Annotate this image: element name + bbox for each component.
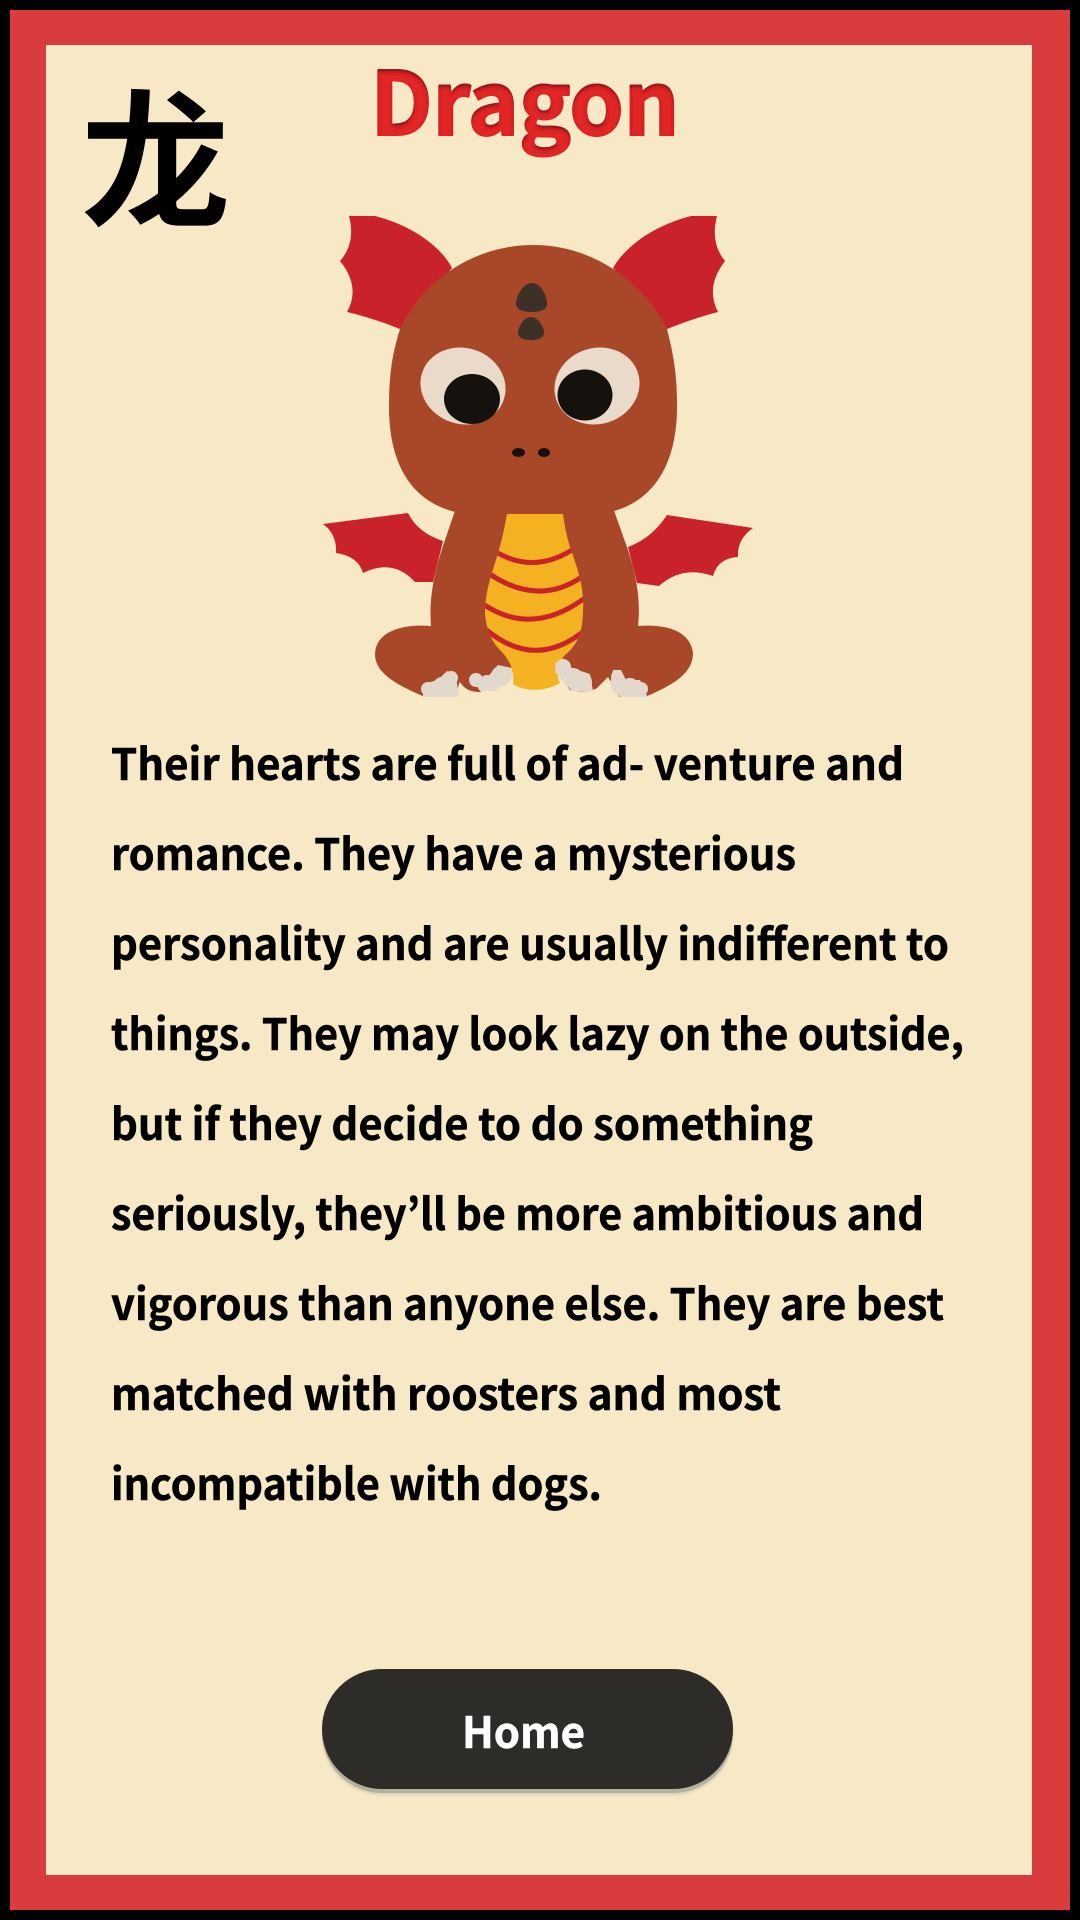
text block: dragon description: Their hearts are full of ad- venture and bbox=[111, 730, 904, 793]
button: Home bbox=[322, 1669, 733, 1795]
belly bbox=[485, 514, 583, 690]
title: Dragon bbox=[370, 34, 680, 161]
text block: dragon description: things. They may look lazy on the outside, bbox=[111, 1000, 964, 1063]
body and legs bbox=[375, 505, 693, 698]
toes bbox=[421, 659, 648, 698]
lower left wing bbox=[323, 513, 443, 582]
text block: dragon description: vigorous than anyone else. They are best bbox=[111, 1270, 944, 1333]
upper right wing bbox=[613, 216, 725, 329]
text block: dragon description: seriously, they’ll be more ambitious and bbox=[111, 1180, 924, 1243]
lower right wing bbox=[628, 515, 753, 586]
heading: Chinese character: 龙 bbox=[81, 42, 230, 258]
text block: dragon description: incompatible with dogs. bbox=[111, 1450, 602, 1513]
text block: dragon description bbox=[111, 730, 964, 1513]
nostrils bbox=[512, 448, 550, 457]
head bbox=[389, 245, 677, 513]
belly stripes bbox=[485, 548, 583, 653]
text block: dragon description: romance. They have a mysterious bbox=[111, 820, 796, 883]
head horns bbox=[516, 283, 547, 340]
text block: dragon description: but if they decide to do something bbox=[111, 1090, 813, 1153]
icon: dragon illustration bbox=[323, 216, 753, 698]
eyes bbox=[420, 348, 640, 424]
text block: dragon description: matched with roosters and most bbox=[111, 1360, 781, 1423]
text block: dragon description: personality and are usually indifferent to bbox=[111, 910, 949, 973]
upper left wing bbox=[340, 216, 452, 329]
button: Home: Home bbox=[462, 1699, 585, 1761]
